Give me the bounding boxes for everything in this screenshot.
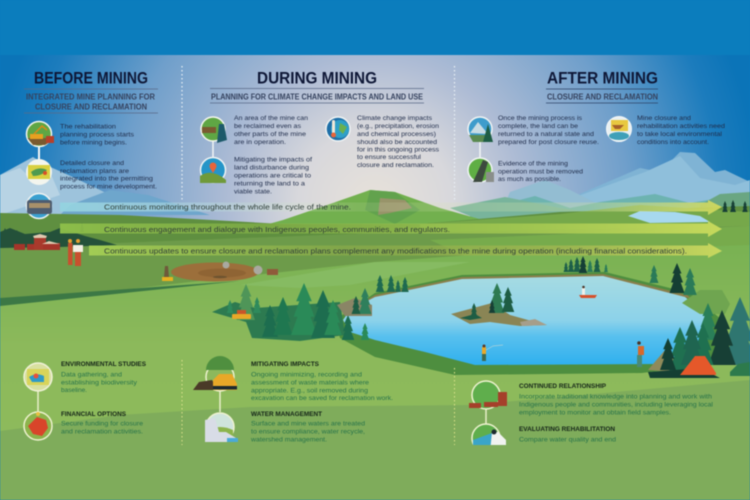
text: mitigating: [234, 156, 312, 196]
text: rehabilitation planning: planning process starts: [60, 132, 135, 138]
text: climate change: (e.g., precipitation, erosion: [357, 123, 439, 130]
icon: water treatment plant: [205, 413, 238, 442]
step: evaluating rehabilitation: Compare water quality and end: [519, 436, 616, 444]
yellow car: [232, 310, 251, 319]
step: environmental studies: [61, 361, 147, 394]
arrow: engagement: [60, 221, 722, 237]
text: local conditions: rehabilitation activities need: [637, 123, 725, 130]
step: continued relationship: Indigenous people and communities, including leveraging local: [519, 402, 714, 408]
sky background: [0, 55, 750, 235]
subheading: after mining: CLOSURE AND RECLAMATION: [547, 92, 658, 102]
heading: before mining: BEFORE MINING: [34, 70, 148, 88]
subheading: after mining: [546, 89, 658, 103]
icon: monitoring machine: [26, 194, 52, 218]
text: evidence removed: Evidence of the mining: [498, 160, 568, 168]
subheading: during mining: PLANNING FOR CLIMATE CHANGE IMPACTS AND LAND USE: [211, 92, 424, 102]
icon: water sampling: [472, 424, 506, 452]
text: climate change: closure and reclamation.: [357, 162, 434, 169]
top band: [0, 0, 750, 56]
trees: forest left of lake: [212, 283, 372, 341]
step: mitigating impacts: Ongoing minimizing, recording and: [251, 372, 362, 378]
step: financial options: Secure funding for closure: [61, 420, 143, 428]
text: detailed plans: [60, 160, 157, 190]
central hill: [240, 190, 500, 235]
subheading: before mining: CLOSURE AND RECLAMATION: [35, 102, 147, 112]
hiker: [637, 341, 644, 367]
step: continued relationship: Incorporate traditional knowledge into planning and work with: [519, 394, 712, 400]
trees: shore bottom right: [648, 297, 750, 378]
trees: far shore: [376, 256, 697, 295]
people with plan: [68, 239, 83, 266]
step: evaluating rehabilitation: EVALUATING REHABILITATION: [519, 426, 615, 433]
step: environmental studies: establishing biodiversity: [61, 380, 138, 386]
text: engagement: Continuous engagement and dialogue with Indigenous peoples, communities, and regulators.: [104, 227, 450, 234]
text: evidence removed: as much as possible.: [498, 176, 561, 183]
text: rehabilitation planning: The rehabilitation: [60, 124, 116, 130]
tree line left: [0, 223, 117, 248]
text: detailed plans: reclamation plans are: [60, 168, 129, 175]
step: mitigating impacts: assessment of waste materials where: [251, 380, 369, 386]
step: water management: watershed management.: [250, 436, 327, 444]
icon: mine structure removal: [468, 158, 494, 182]
text: monitoring: Continuous monitoring throughout the whole life cycle of the mine.: [104, 204, 351, 212]
text: mitigating: returning the land to a: [234, 180, 305, 188]
panel: after mining steps: [469, 381, 714, 452]
hill beside lake: [682, 290, 730, 314]
icon: thermometer and globe: [326, 117, 350, 141]
panel: before mining steps: [24, 361, 147, 440]
text: updates: Continuous updates to ensure closure and reclamation plans complement any modifications to the mine during operation (including financial considerations).: [104, 248, 687, 256]
step: evaluating rehabilitation: [519, 426, 616, 444]
text: land returned: Once the mining process is: [498, 115, 583, 122]
fisher: [482, 344, 503, 361]
text: climate change: Climate change impacts: [357, 115, 433, 122]
text: climate change: should also be accounted: [357, 139, 437, 146]
step: water management: to ensure compliance, water recycle,: [251, 428, 365, 436]
text: climate change: and chemical processes): [357, 131, 436, 138]
step: mitigating impacts: MITIGATING IMPACTS: [251, 361, 320, 368]
text: evidence removed: operation must be removed: [498, 168, 583, 176]
heading: during mining: DURING MINING: [257, 70, 377, 88]
subheading: during mining: [210, 88, 424, 103]
heading: after mining: AFTER MINING: [547, 70, 658, 88]
text: mitigating: operations are critical to: [234, 172, 311, 180]
icon: excavator: [26, 122, 54, 160]
text: climate change: to ensure successful: [357, 154, 421, 161]
step: financial options: FINANCIAL OPTIONS: [61, 411, 127, 418]
brown shoreline: [340, 274, 692, 316]
icon: local conditions map: [606, 116, 632, 142]
step: environmental studies: ENVIRONMENTAL STUDIES: [61, 361, 147, 368]
text: local conditions: Mine closure and: [637, 115, 691, 122]
panel: during mining: [200, 70, 440, 196]
step: mitigating impacts: appropriate. E.g., soil removed during: [251, 388, 368, 394]
panel: before mining: [24, 70, 158, 218]
orange tent: [680, 356, 716, 375]
icon: bulldozer: [193, 356, 237, 412]
text: detailed plans: integrated into the permitting: [60, 176, 153, 182]
text: area reclaimed: are in operation.: [234, 139, 286, 146]
text: climate change: for in this ongoing process: [357, 146, 440, 154]
lake: [343, 276, 712, 365]
panel: during mining steps: [193, 356, 393, 444]
text: mitigating: Mitigating the impacts of: [234, 156, 312, 164]
bottom band: [0, 445, 750, 500]
text: rehabilitation planning: [60, 124, 135, 146]
panel: after mining: [468, 70, 725, 183]
small pond: [628, 211, 710, 223]
arrow: monitoring: [60, 200, 722, 215]
mine pit: [162, 262, 278, 282]
icon: worker with soil: [201, 117, 227, 158]
step: mitigating impacts: [251, 361, 393, 402]
text: local conditions: to take local environmental: [637, 131, 723, 138]
icon: community buildings: [469, 381, 507, 424]
mountains: right range: [450, 152, 750, 225]
icon: environmental map: [24, 363, 52, 414]
text: local conditions: [637, 115, 725, 146]
icon: closure plan map: [26, 159, 52, 185]
arrow: updates: [89, 243, 722, 258]
step: mitigating impacts: excavation can be saved for reclamation work.: [251, 395, 393, 402]
ground layers: [0, 205, 750, 445]
step: water management: Surface and mine waters are treated: [251, 420, 365, 428]
icon: location pin: [200, 158, 226, 183]
step: financial options: [61, 411, 143, 436]
text: mitigating: viable state.: [234, 188, 272, 196]
step: environmental studies: Data gathering, and: [61, 372, 122, 378]
text: land returned: [498, 115, 599, 146]
text: area reclaimed: other parts of the mine: [234, 131, 306, 138]
mountains: left range: [0, 157, 210, 215]
subheading: before mining: INTEGRATED MINE PLANNING FOR: [26, 92, 155, 102]
text: local conditions: conditions into account.: [637, 139, 709, 146]
text: land returned: complete, the land can be: [498, 123, 578, 130]
text: mitigating: land disturbance during: [234, 164, 309, 172]
text: detailed plans: process for mine development.: [60, 184, 157, 190]
text: area reclaimed: [234, 115, 308, 146]
step: water management: WATER MANAGEMENT: [251, 411, 322, 418]
text: land returned: returned to a natural state and: [498, 131, 594, 138]
text: land returned: prepared for post closure reuse.: [498, 139, 599, 146]
text: rehabilitation planning: before mining begins.: [60, 140, 127, 146]
icon: mountain landscape: [468, 117, 493, 158]
bank around lake: [335, 272, 725, 375]
island: [451, 283, 547, 326]
subheading: before mining: [24, 89, 158, 113]
step: continued relationship: [519, 383, 714, 416]
step: environmental studies: baseline.: [61, 387, 87, 394]
step: water management: [250, 411, 365, 444]
text: area reclaimed: An area of the mine can: [234, 115, 308, 122]
step: financial options: and reclamation activities.: [61, 428, 143, 436]
trees beyond the pond: [722, 200, 748, 212]
boat: [579, 286, 597, 298]
icon: piggy bank: [24, 412, 52, 440]
text: area reclaimed: be reclaimed even as: [234, 123, 302, 130]
text: climate change: [357, 115, 440, 169]
step: continued relationship: CONTINUED RELATIONSHIP: [519, 383, 607, 390]
text: evidence removed: [498, 160, 583, 183]
text: detailed plans: Detailed closure and: [60, 160, 124, 167]
farm buildings: [14, 234, 60, 250]
step: continued relationship: employment to monitor and obtain field samples.: [519, 410, 671, 416]
